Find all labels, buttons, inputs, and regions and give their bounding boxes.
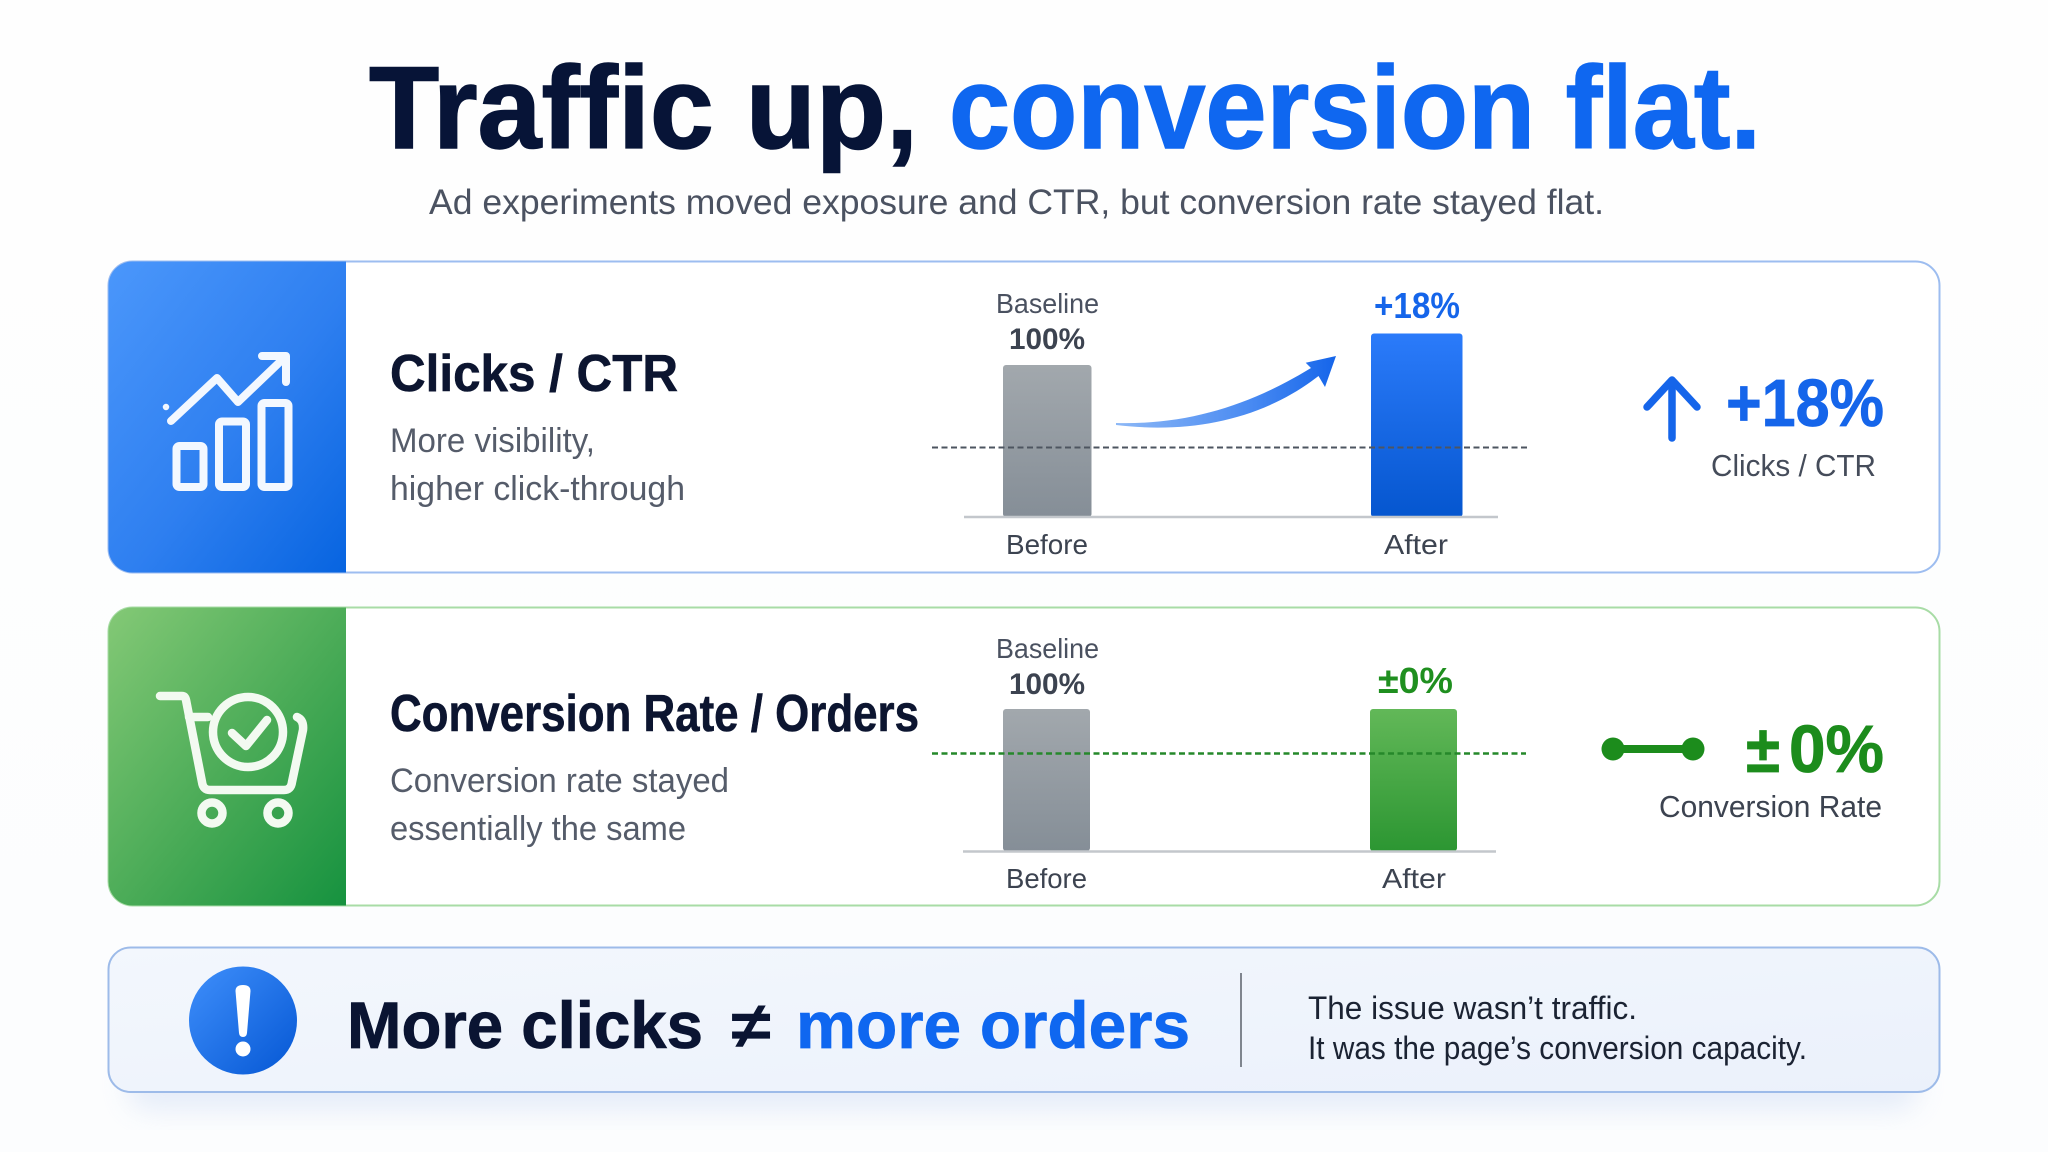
icon tile: blue chart	[108, 261, 346, 573]
after value: +18%	[1374, 285, 1460, 326]
heading: conversion rate / orders: Conversion Rate / Orders	[390, 685, 919, 743]
heading: clicks / CTR: Clicks / CTR	[390, 345, 678, 403]
bar: before	[1003, 365, 1092, 517]
description: clicks	[390, 422, 685, 508]
icon: flat connector	[1602, 738, 1704, 760]
bar: before	[1003, 709, 1090, 851]
panel: conversion rate / orders	[108, 607, 1940, 906]
takeaway explanation: It was the page’s conversion capacity.	[1308, 1030, 1807, 1066]
axis labels: Before	[1006, 529, 1088, 560]
KPI: +18%	[1647, 366, 1884, 483]
callout: takeaway	[108, 948, 1940, 1110]
subtitle: Ad experiments moved exposure and CTR, but conversion rate stayed flat.	[429, 183, 1604, 222]
axis labels: Before	[1006, 863, 1087, 894]
axis labels: After	[1384, 529, 1448, 560]
icon: shopping cart with check	[160, 696, 303, 824]
baseline label	[996, 633, 1099, 701]
bar chart: clicks before and after	[932, 285, 1530, 560]
icon tile: green cart	[108, 607, 346, 906]
description: conversion	[390, 762, 729, 848]
takeaway headline: more orders	[796, 988, 1190, 1062]
KPI: ±0%: Conversion Rate	[1659, 789, 1882, 824]
description: conversion: essentially the same	[390, 810, 686, 848]
axis labels: After	[1382, 863, 1446, 894]
title: Traffic up,	[369, 42, 918, 173]
KPI: +18%: +18%	[1726, 366, 1884, 441]
takeaway headline	[347, 988, 1190, 1062]
axis labels	[1006, 529, 1448, 560]
baseline label: Baseline	[996, 633, 1099, 664]
takeaway headline: More clicks	[347, 988, 703, 1062]
icon: up arrow	[1647, 380, 1697, 438]
arrow: growth curve	[1116, 356, 1336, 428]
axis labels	[1006, 863, 1446, 894]
description: clicks: higher click-through	[390, 470, 685, 508]
bar chart: conversion before and after	[932, 633, 1526, 894]
title: conversion flat.	[949, 42, 1761, 173]
bar: after	[1371, 334, 1462, 517]
KPI: +18%: Clicks / CTR	[1711, 448, 1876, 483]
baseline label: 100%	[1009, 668, 1085, 701]
KPI: ±0%: 0%	[1789, 712, 1884, 787]
description: conversion: Conversion rate stayed	[390, 762, 729, 800]
icon: rising chart	[164, 356, 288, 487]
description: clicks: More visibility,	[390, 422, 595, 460]
KPI: ±0%	[1602, 712, 1884, 824]
panel: clicks / CTR	[108, 261, 1940, 573]
baseline label	[996, 288, 1099, 356]
takeaway headline: ≠	[731, 988, 771, 1062]
baseline label: Baseline	[996, 288, 1099, 319]
bar: after	[1370, 709, 1457, 851]
takeaway explanation	[1308, 990, 1807, 1066]
KPI: ±0%: ±	[1746, 712, 1780, 787]
title	[369, 42, 1761, 173]
icon: exclamation mark	[189, 966, 297, 1074]
takeaway explanation: The issue wasn’t traffic.	[1308, 990, 1637, 1026]
baseline label: 100%	[1009, 323, 1085, 356]
after value: ±0%	[1378, 660, 1453, 701]
